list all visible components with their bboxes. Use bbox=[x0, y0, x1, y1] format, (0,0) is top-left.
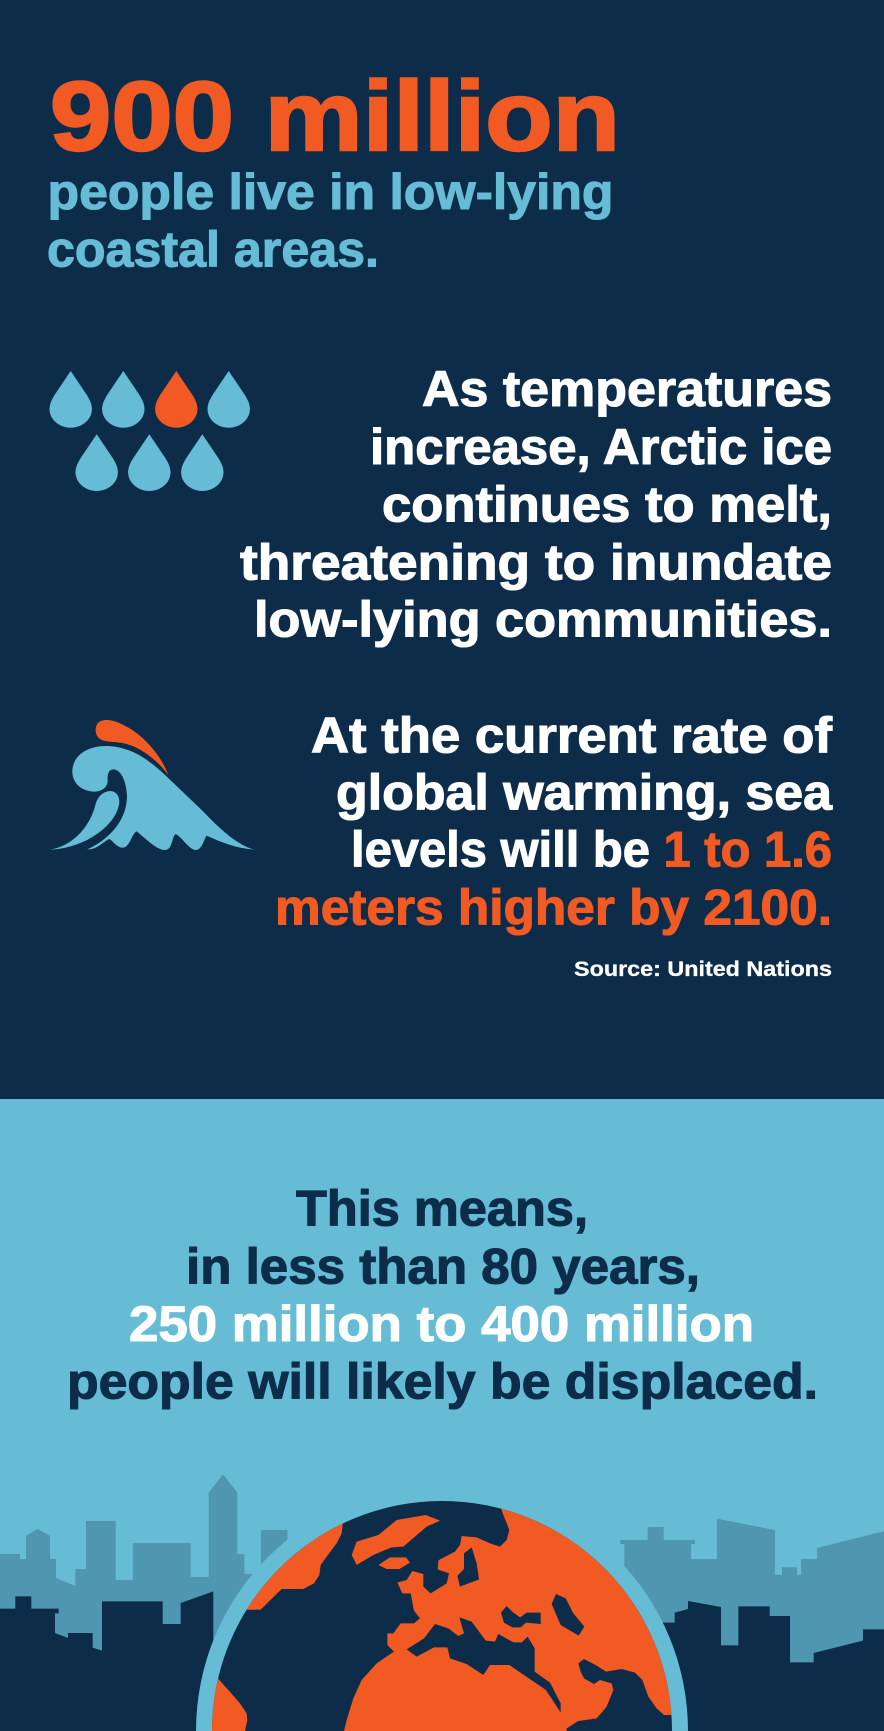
icon: wave bbox=[50, 720, 254, 850]
icon: water drops bbox=[49, 371, 250, 491]
text block: displacement: This means, bbox=[296, 1181, 588, 1237]
text block: displacement bbox=[67, 1181, 818, 1409]
subtitle line 1: people live in low-lying bbox=[48, 164, 614, 220]
panel: dark top section bbox=[0, 0, 884, 1099]
source note: Source: United Nations bbox=[574, 958, 832, 981]
illustration: city skyline and globe bbox=[0, 1474, 884, 1731]
subtitle line 2: coastal areas. bbox=[47, 222, 379, 278]
text block: arctic ice: continues to melt, bbox=[382, 477, 832, 533]
text block: sea levels: At the current rate of bbox=[311, 707, 832, 763]
skyline: back layer bbox=[0, 1474, 884, 1730]
skyline: front layer bbox=[0, 1591, 884, 1731]
text block: displacement: in less than 80 years, bbox=[186, 1238, 700, 1294]
text block: arctic ice: low-lying communities. bbox=[254, 592, 832, 648]
globe continents bbox=[212, 1508, 672, 1731]
text block: sea levels: meters higher by 2100. bbox=[275, 879, 832, 935]
panel: light lower section bbox=[0, 1099, 884, 1731]
text block: displacement: people will likely be displaced. bbox=[67, 1353, 818, 1409]
text block: arctic ice: threatening to inundate bbox=[240, 534, 832, 590]
text block: arctic ice bbox=[240, 361, 832, 648]
heading: 900 million bbox=[47, 61, 620, 278]
globe ring bbox=[196, 1485, 688, 1731]
wave spray bbox=[96, 720, 168, 775]
text block: sea levels: global warming, sea bbox=[336, 764, 833, 820]
wave curl bbox=[50, 791, 119, 850]
text block: arctic ice: As temperatures bbox=[422, 361, 832, 417]
title number: 900 million bbox=[50, 61, 620, 171]
globe ocean bbox=[212, 1501, 672, 1731]
text block: sea levels: levels will be 1 to 1.6 bbox=[351, 822, 832, 878]
text block: displacement: 250 million to 400 million bbox=[129, 1296, 754, 1352]
text block: arctic ice: increase, Arctic ice bbox=[370, 419, 832, 475]
wave body bbox=[72, 746, 254, 850]
text block: sea levels bbox=[275, 707, 833, 935]
